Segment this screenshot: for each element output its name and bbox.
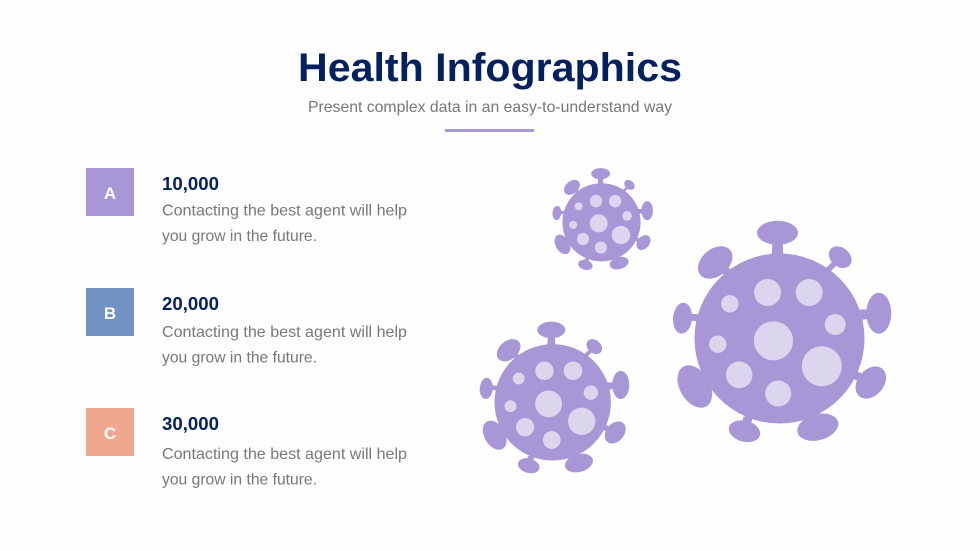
description C: you grow in the future. <box>162 472 317 488</box>
badge B: B <box>104 304 116 323</box>
panel: item B <box>86 288 407 366</box>
badge A: A <box>104 184 116 203</box>
description A <box>162 202 407 245</box>
description B: Contacting the best agent will help <box>162 324 407 341</box>
panel: item C <box>86 408 407 488</box>
title: Health Infographics <box>298 46 682 90</box>
value 30,000: 30,000 <box>162 413 219 434</box>
subtitle: Present complex data in an easy-to-understand way <box>308 99 672 116</box>
badge B <box>86 288 134 336</box>
description A: Contacting the best agent will help <box>162 202 407 220</box>
icon: large virus <box>670 221 892 445</box>
badge C <box>86 408 134 456</box>
description C: Contacting the best agent will help <box>162 446 407 463</box>
value 10,000: 10,000 <box>162 173 219 194</box>
description B: you grow in the future. <box>162 350 317 366</box>
description C <box>162 446 407 488</box>
panel: item A <box>86 168 407 245</box>
value 20,000: 20,000 <box>162 293 219 314</box>
badge C: C <box>104 424 116 443</box>
icon: small virus <box>551 168 653 272</box>
title underline <box>445 129 534 132</box>
description A: you grow in the future. <box>162 228 317 245</box>
description B <box>162 324 407 366</box>
icon: medium virus <box>478 322 630 476</box>
badge A <box>86 168 134 216</box>
